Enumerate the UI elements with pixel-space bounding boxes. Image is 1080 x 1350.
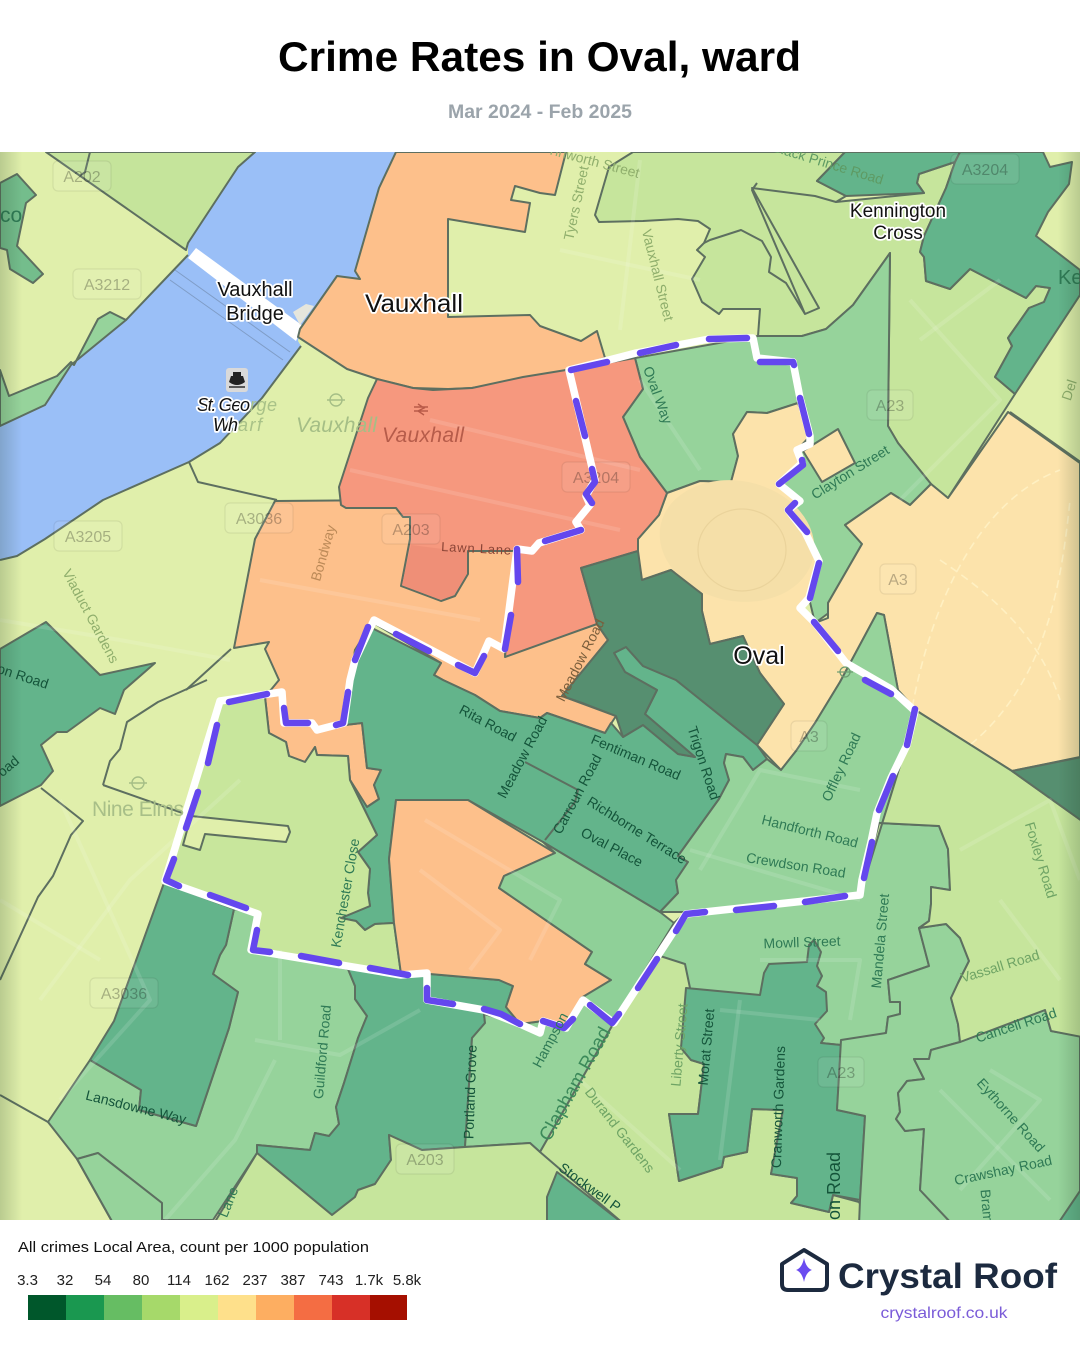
legend scale labels: 114 [167,1272,191,1289]
street labels: Stockwell P [556,1159,624,1215]
area: A3036 green block [90,883,238,1126]
area: small yellow block [803,429,855,482]
place labels [0,201,1080,821]
street labels: Offley Road [818,730,864,804]
subtitle: date range: Mar 2024 - Feb 2025 [448,102,632,123]
place labels: Cross [873,223,923,244]
street labels: Black Prince Road [771,139,885,187]
place labels: Nine Elms [92,798,184,821]
area: Eythorne Road medium green [896,1010,1080,1225]
street labels: on Road [824,1152,844,1220]
street labels: Handforth Road [760,811,860,851]
street labels: Meadow Road [552,616,608,704]
street labels: Eythorne Road [974,1075,1048,1155]
place labels: Wh [213,415,238,435]
street labels: Lansdowne Way [84,1087,188,1127]
road shields [53,154,1019,1174]
street labels: Crewdson Road [745,849,847,881]
faint road network [0,160,1080,1220]
street labels: Richborne Terrace [584,793,690,867]
legend colour bar [28,1295,407,1320]
place labels: St. Geo [197,395,250,415]
legend scale labels: 162 [204,1272,230,1289]
ward boundary: purple dashes [166,338,915,1028]
street labels: Tyers Street [560,164,592,242]
area: Lawn Lane lobe tint [402,545,467,600]
area: south centre medium green [499,842,674,1024]
legend scale labels: 1.7k [355,1272,384,1289]
area: south-west medium green [48,909,367,1220]
street labels: Lawn Lane [441,539,512,558]
area: north-west green [46,152,255,250]
street labels: Rita Road [457,701,519,745]
area: riverside strip [0,312,126,426]
area: Nine Elms west dark green [0,622,155,806]
area: dark green centre (highest safety) [562,551,784,757]
street labels: Kenchester Close [328,837,363,949]
street labels: Cancell Road [974,1004,1058,1046]
street labels: Mowll Street [763,933,841,951]
place labels: Bridge [226,303,284,325]
street labels: Vassall Road [959,946,1041,986]
legend scale labels: 32 [57,1272,73,1289]
street labels: Hampson [529,1010,571,1070]
area: Clapham/Durand light green [213,955,870,1225]
icon: tube Nine Elms [129,777,147,789]
area: inner ward west light green [165,697,401,974]
street labels: Vauxhall Street [639,228,677,323]
legend scale labels: 3.3 [17,1272,38,1289]
street labels: Foxley Road [1022,820,1060,900]
street labels: Tinworth Street [546,141,641,181]
road shields: A23 [876,398,904,415]
road shields: A3036 [236,511,282,528]
area: Kennington dark green, east [920,152,1080,394]
street labels: Bram [978,1189,996,1223]
street labels: Cranworth Gardens [768,1046,788,1168]
place labels: Vauxhall [296,414,378,437]
area: Oval Way / Clayton Street medium green [623,253,931,623]
river Thames [0,152,396,560]
logo wordmark: Crystal Roof [838,1257,1057,1296]
area: Vauxhall Street / Kennington light green [595,152,1050,498]
street labels: Meadow Road [494,713,550,801]
street labels: Portland Grove [460,1044,480,1139]
Vauxhall Bridge [188,248,303,341]
Oval cricket ground [676,480,814,590]
area: Hampson Way medium green [465,998,612,1152]
legend scale labels: 5.8k [393,1272,422,1289]
street labels: Carroun Road [549,751,605,837]
place labels: arf [238,415,264,435]
boundary lines in west [0,788,83,980]
logo icon: house with star [782,1250,827,1290]
legend scale labels: 80 [133,1272,149,1289]
area: Foxley Road light green [860,711,1080,1042]
area: orange south block [389,800,611,1028]
place labels: co [0,204,22,227]
icon: tube Vauxhall [327,394,345,406]
street labels: Clayton Street [808,442,892,502]
area: Kennington dark green, north [817,152,960,196]
area: lower small medium green [77,1153,162,1225]
area: Rita Road / Fentiman Road green [341,628,767,930]
street labels: Crawshay Road [953,1152,1053,1188]
Kennington Park paths [910,470,1070,760]
area: Vauxhall station red with Lawn Lane lobe [339,358,667,657]
map edge shading [0,152,1080,1220]
street labels: Liberty Street [667,1003,691,1087]
area: Guildford Road dark-mid green [257,969,520,1215]
area: notch of lighter ground [183,816,290,850]
place labels: Kennington [850,201,946,222]
icon: tube Oval [837,667,853,677]
street labels: Lane [215,1184,241,1219]
legend title: All crimes Local Area, count per 1000 population [18,1239,369,1256]
place labels: Vauxhall [365,290,463,318]
street labels: Bondway [307,523,339,583]
street labels: Morat Street [695,1008,717,1086]
road shields: A3036 [101,986,147,1003]
legend scale labels: 743 [318,1272,344,1289]
road shields: A3 [799,729,819,746]
street labels: Guildford Road [310,1004,334,1100]
area: Stockwell green [546,1171,618,1220]
street labels: Durand Gardens [582,1084,658,1176]
place labels: Oval [733,642,785,670]
area: Oval and east yellow [633,403,1080,771]
street labels: Del [1058,378,1080,402]
road shields: A3204 [962,162,1008,179]
road shields: A3205 [65,529,111,546]
road shields: A3204 [573,470,619,487]
area: A23 medium green [837,924,969,1225]
street labels: Oval Place [578,824,646,870]
street labels: Mandela Street [868,893,892,989]
street labels: Clapham Road [536,1024,615,1145]
road shields: A23 [827,1065,855,1082]
place labels: rge [250,395,277,415]
street labels: Fentiman Road [589,731,683,783]
website link: crystalroof.co.uk [880,1305,1009,1322]
road shields: A202 [63,169,101,186]
legend scale labels: 237 [242,1272,268,1289]
area: Bondway orange [234,500,616,807]
street labels: Oval Way [640,364,676,426]
street labels: Viaduct Gardens [60,566,122,666]
icon: ferry pier [226,368,248,392]
place labels: Vauxhall [217,279,293,301]
legend scale labels [17,1272,422,1289]
area: south bank lines [189,462,277,500]
ward boundary: white base [165,338,915,1033]
icon: rail station [414,404,428,415]
title: Crime Rates in Oval, ward [278,33,801,80]
area: dark green triangle east [1012,757,1080,821]
place labels: Vauxhall [382,424,465,447]
road shields: A3 [888,572,908,589]
legend scale labels: 54 [95,1272,111,1289]
area: Offley Road medium green [660,613,917,912]
area: Mowll Street medium green [657,823,950,1045]
road shields: A203 [406,1152,444,1169]
street labels: Trigon Road [685,724,723,802]
area: Vauxhall north orange [298,152,605,389]
river bank lines [0,346,301,560]
road shields: A203 [392,522,430,539]
road shields: A3212 [84,277,130,294]
legend scale labels: 387 [280,1272,306,1289]
area: Morat Street green [669,940,865,1212]
area: far north-west dark green [0,174,43,283]
